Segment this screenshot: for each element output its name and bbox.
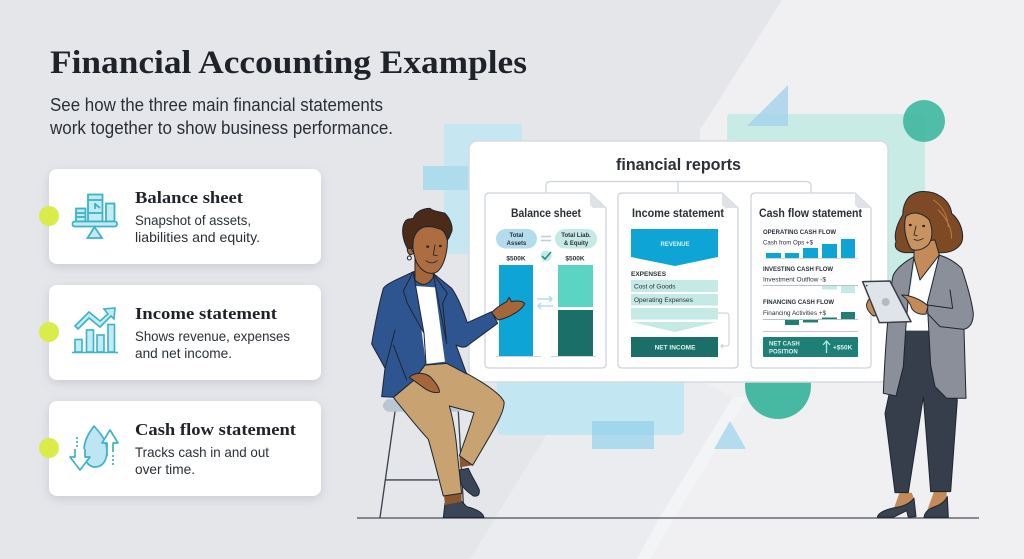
- decorative background shapes: [423, 85, 945, 449]
- subtitle: work together to show business performance.: [49, 118, 393, 138]
- document: balance sheet: Total Liab.: [561, 233, 591, 239]
- document: cash flow statement: Financing Activities +$: [763, 310, 826, 317]
- document: balance sheet: Balance sheet: [511, 208, 581, 220]
- panel: financial reports: [469, 141, 888, 382]
- document: cash flow statement: NET CASH: [769, 342, 800, 348]
- icon: rising bar chart: [72, 308, 118, 352]
- document: income statement: EXPENSES: [631, 271, 667, 278]
- document: balance sheet: Total: [510, 233, 524, 239]
- document: cash flow statement: Investment Outflow -$: [763, 276, 826, 284]
- card: cash flow statement: [39, 401, 321, 496]
- document: cash flow statement: [751, 193, 871, 368]
- document: income statement: Income statement: [632, 208, 724, 220]
- document: balance sheet: [485, 193, 606, 368]
- document: cash flow statement: +$50K: [833, 344, 853, 352]
- document: income statement: Operating Expenses: [634, 297, 694, 304]
- subtitle: [49, 95, 393, 138]
- card: balance sheet: liabilities and equity.: [135, 229, 260, 245]
- card: balance sheet: Snapshot of assets,: [135, 212, 251, 228]
- heading: financial reports: financial reports: [616, 155, 741, 174]
- document: cash flow statement: INVESTING CASH FLOW: [763, 266, 833, 273]
- document: income statement: REVENUE: [660, 242, 690, 248]
- card: cash flow statement: Cash flow statement: [135, 420, 296, 439]
- document: income statement: NET INCOME: [655, 344, 696, 352]
- document: cash flow statement: Cash flow statement: [759, 208, 862, 220]
- card: income statement: Income statement: [135, 304, 277, 323]
- document: cash flow statement: Cash from Ops +$: [763, 240, 813, 246]
- document: balance sheet: Assets: [507, 241, 527, 247]
- card: income statement: Shows revenue, expenses: [135, 328, 290, 344]
- figure: seated man: [372, 208, 525, 518]
- document: cash flow statement: OPERATING CASH FLOW: [763, 229, 836, 236]
- title: Financial Accounting Examples: [50, 45, 527, 81]
- card: income statement: [39, 285, 321, 380]
- subtitle: See how the three main financial statements: [50, 95, 383, 115]
- document: cash flow statement: FINANCING CASH FLOW: [763, 299, 834, 306]
- card: cash flow statement: over time.: [135, 461, 195, 477]
- document: income statement: Cost of Goods: [634, 284, 676, 290]
- icon: water drop with arrows: [70, 426, 118, 470]
- document: balance sheet: $500K: [506, 256, 526, 262]
- card: balance sheet: Balance sheet: [135, 188, 243, 207]
- icon: balance scale with blocks: [72, 194, 117, 238]
- document: balance sheet: $500K: [565, 256, 585, 262]
- document: balance sheet: & Equity: [564, 241, 589, 247]
- card: cash flow statement: Tracks cash in and out: [135, 444, 269, 460]
- card: balance sheet: [39, 169, 321, 264]
- floor line: [357, 517, 979, 519]
- document: cash flow statement: POSITION: [769, 350, 798, 356]
- card: income statement: and net income.: [135, 345, 232, 361]
- document: income statement: [618, 193, 738, 368]
- stool: [380, 399, 463, 518]
- figure: standing woman: [863, 191, 973, 517]
